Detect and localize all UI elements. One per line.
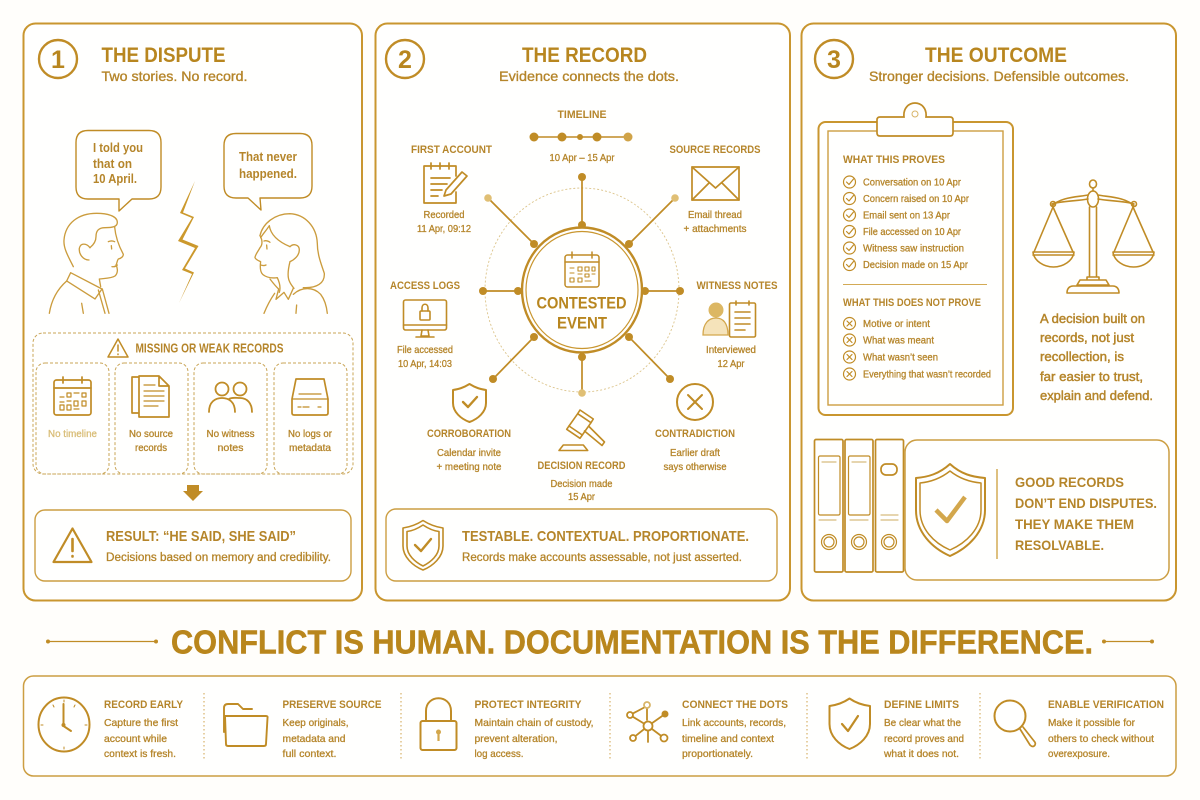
list heading: what this does not prove: WHAT THIS DOES NOT PROVE bbox=[843, 297, 981, 309]
card: no logs or metadata bbox=[274, 363, 347, 474]
item: protect integrity: log access. bbox=[474, 748, 524, 760]
card: no source records: No source bbox=[129, 428, 173, 440]
center node: contested event: CONTESTED bbox=[536, 294, 626, 312]
list: not proven items: What was meant bbox=[863, 334, 934, 346]
node: contradiction: CONTRADICTION bbox=[655, 428, 735, 440]
item: define limits: what it does not. bbox=[883, 748, 959, 760]
heading: the dispute: THE DISPUTE bbox=[102, 44, 226, 67]
callout: good records bbox=[905, 440, 1169, 580]
item: connect the dots: CONNECT THE DOTS bbox=[682, 699, 788, 711]
list: proven items: Conversation on 10 Apr bbox=[863, 176, 961, 188]
step number 3: 3 bbox=[827, 46, 841, 74]
item: define limits: DEFINE LIMITS bbox=[884, 699, 959, 711]
icon: binders bbox=[814, 440, 904, 572]
callout: result he said she said: RESULT: “HE SAID, SHE SAID” bbox=[106, 528, 296, 545]
list heading: what this proves: WHAT THIS PROVES bbox=[843, 154, 945, 166]
node: decision record: DECISION RECORD bbox=[538, 460, 626, 472]
item: enable verification: Make it possible for bbox=[1048, 717, 1135, 729]
item: define limits: record proves and bbox=[884, 733, 964, 745]
icon: man in profile bbox=[49, 213, 123, 313]
node: contradiction bbox=[655, 384, 735, 473]
item: enable verification: ENABLE VERIFICATION bbox=[1048, 699, 1164, 711]
item: preserve source: Keep originals, bbox=[282, 717, 348, 729]
item: preserve source: PRESERVE SOURCE bbox=[282, 699, 382, 711]
speech bubble: I told you: I told you bbox=[93, 141, 143, 155]
item: protect integrity bbox=[420, 698, 594, 760]
card: no timeline: No timeline bbox=[48, 428, 97, 440]
icon: woman in profile bbox=[255, 214, 327, 313]
item: preserve source bbox=[224, 699, 382, 760]
list: not proven items: What wasn’t seen bbox=[863, 352, 938, 364]
card: no witness notes: No witness bbox=[206, 428, 254, 440]
callout: result he said she said: Decisions based on memory and credibility. bbox=[106, 552, 331, 564]
node: access logs: ACCESS LOGS bbox=[390, 280, 460, 292]
item: record early: RECORD EARLY bbox=[104, 699, 184, 711]
node: witness notes: 12 Apr bbox=[718, 358, 745, 370]
callout: testable contextual proportionate: TESTABLE. CONTEXTUAL. PROPORTIONATE. bbox=[462, 528, 749, 545]
node: source records bbox=[670, 144, 760, 235]
speech bubble: I told you: that on bbox=[93, 157, 132, 171]
callout: good records: RESOLVABLE. bbox=[1015, 537, 1104, 553]
card: no timeline bbox=[36, 363, 109, 474]
speech bubble: that never happened bbox=[224, 134, 312, 210]
card: no source records: records bbox=[135, 442, 167, 454]
icon: scales of justice bbox=[1033, 180, 1154, 293]
card: no logs or metadata: No logs or bbox=[288, 428, 332, 440]
item: enable verification: others to check without bbox=[1048, 733, 1154, 745]
panel: the dispute bbox=[24, 24, 362, 600]
text: a decision built on records: A decision built on bbox=[1040, 312, 1145, 326]
list: not proven items bbox=[844, 318, 991, 380]
list: not proven items: Everything that wasn’t recorded bbox=[863, 368, 991, 380]
node: first account: Recorded bbox=[424, 209, 465, 221]
arrow: down to result bbox=[183, 485, 203, 501]
center node: contested event bbox=[522, 228, 642, 352]
panel: the record bbox=[376, 24, 790, 600]
node: timeline: TIMELINE bbox=[558, 109, 606, 121]
item: protect integrity: PROTECT INTEGRITY bbox=[474, 699, 582, 711]
speech bubble: I told you bbox=[76, 130, 161, 211]
node: corroboration: + meeting note bbox=[436, 461, 502, 473]
item: enable verification: overexposure. bbox=[1048, 748, 1110, 760]
card: no witness notes: notes bbox=[218, 442, 244, 454]
step number 1: 1 bbox=[51, 46, 65, 74]
callout: good records: GOOD RECORDS bbox=[1015, 474, 1124, 490]
node: corroboration: Calendar invite bbox=[437, 447, 501, 459]
center node: contested event: EVENT bbox=[557, 314, 608, 332]
item: record early: Capture the first bbox=[104, 717, 178, 729]
node: source records: + attachments bbox=[684, 223, 746, 235]
hub diagram: spokes and rings bbox=[479, 173, 684, 397]
text: a decision built on records: far easier to trust, bbox=[1040, 370, 1143, 384]
item: define limits: Be clear what the bbox=[884, 717, 961, 729]
list: proven items: Concern raised on 10 Apr bbox=[863, 193, 969, 205]
clipboard: proves and does not prove bbox=[818, 103, 1013, 415]
speech bubble: I told you: 10 April. bbox=[93, 172, 137, 186]
item: connect the dots: Link accounts, records, bbox=[682, 717, 786, 729]
subheading: stronger decisions: Stronger decisions. Defensible outcomes. bbox=[869, 68, 1129, 84]
step number 2: 2 bbox=[398, 46, 412, 74]
callout: testable contextual proportionate bbox=[386, 509, 777, 581]
list: not proven items: Motive or intent bbox=[863, 318, 930, 330]
heading: missing or weak records: MISSING OR WEAK RECORDS bbox=[136, 342, 284, 356]
speech bubble: that never happened: happened. bbox=[239, 167, 297, 181]
icon: calendar bbox=[565, 252, 599, 287]
item: record early bbox=[38, 698, 184, 760]
node: decision record: 15 Apr bbox=[568, 491, 595, 503]
text: a decision built on records: explain and defend. bbox=[1040, 389, 1153, 403]
icon: large shield bbox=[916, 464, 985, 556]
icon: shield with check bbox=[403, 520, 443, 570]
text: a decision built on records bbox=[1040, 312, 1153, 403]
list: proven items: Decision made on 15 Apr bbox=[863, 259, 968, 271]
node: access logs bbox=[390, 280, 460, 370]
node: contradiction: Earlier draft bbox=[670, 447, 720, 459]
node: source records: Email thread bbox=[688, 209, 742, 221]
text: a decision built on records: records, not just bbox=[1040, 331, 1135, 345]
node: first account bbox=[411, 144, 492, 235]
node: witness notes: WITNESS NOTES bbox=[696, 280, 778, 292]
icon: clip bbox=[877, 103, 953, 136]
step number 2 bbox=[386, 40, 424, 78]
list: proven items: Witness saw instruction bbox=[863, 242, 964, 254]
list: proven items: File accessed on 10 Apr bbox=[863, 226, 961, 238]
subheading: two stories: Two stories. No record. bbox=[102, 68, 248, 84]
panel: missing or weak records bbox=[33, 333, 353, 474]
card: no witness notes bbox=[194, 363, 267, 474]
heading: the outcome: THE OUTCOME bbox=[925, 44, 1067, 67]
card: no source records bbox=[115, 363, 188, 474]
node: witness notes bbox=[696, 280, 778, 370]
tagline banner: CONFLICT IS HUMAN. DOCUMENTATION IS THE DIFFERENCE. bbox=[171, 624, 1093, 660]
item: enable verification bbox=[994, 699, 1164, 760]
panel: the outcome bbox=[802, 24, 1176, 600]
node: first account: FIRST ACCOUNT bbox=[411, 144, 492, 156]
item: connect the dots: timeline and context bbox=[682, 733, 774, 745]
list: proven items bbox=[844, 176, 969, 271]
icon: lightning bolt bbox=[178, 181, 198, 303]
text: a decision built on records: recollection, is bbox=[1040, 350, 1124, 364]
subheading: evidence connects the dots: Evidence connects the dots. bbox=[499, 68, 679, 84]
item: protect integrity: prevent alteration, bbox=[474, 733, 558, 745]
node: decision record: Decision made bbox=[550, 478, 613, 490]
item: preserve source: full context. bbox=[282, 748, 336, 760]
icon: warning small bbox=[108, 339, 128, 357]
callout: good records: DON’T END DISPUTES. bbox=[1015, 495, 1157, 511]
item: connect the dots bbox=[627, 699, 788, 760]
heading: the record: THE RECORD bbox=[522, 44, 647, 67]
item: record early: account while bbox=[104, 733, 167, 745]
callout: result he said she said bbox=[35, 510, 351, 581]
item: define limits bbox=[830, 698, 964, 760]
node: timeline bbox=[530, 109, 632, 164]
item: connect the dots: proportionately. bbox=[682, 748, 753, 760]
node: access logs: File accessed bbox=[397, 344, 453, 356]
node: first account: 11 Apr, 09:12 bbox=[417, 223, 471, 235]
callout: testable contextual proportionate: Records make accounts assessable, not just asserted. bbox=[462, 550, 742, 564]
node: timeline: 10 Apr – 15 Apr bbox=[550, 152, 615, 164]
icon: warning bbox=[54, 528, 92, 562]
item: preserve source: metadata and bbox=[282, 733, 346, 745]
card: no logs or metadata: metadata bbox=[289, 442, 331, 454]
list: proven items: Email sent on 13 Apr bbox=[863, 210, 950, 222]
step number 1 bbox=[39, 40, 77, 78]
speech bubble: that never happened: That never bbox=[239, 150, 297, 164]
node: decision record bbox=[538, 410, 626, 503]
item: record early: context is fresh. bbox=[104, 748, 176, 760]
node: contradiction: says otherwise bbox=[664, 461, 727, 473]
panel: six practices bbox=[24, 676, 1176, 776]
node: corroboration: CORROBORATION bbox=[427, 428, 511, 440]
node: access logs: 10 Apr, 14:03 bbox=[398, 358, 452, 370]
node: corroboration bbox=[427, 384, 511, 473]
node: witness notes: Interviewed bbox=[706, 344, 756, 356]
callout: good records: THEY MAKE THEM bbox=[1015, 516, 1134, 532]
node: source records: SOURCE RECORDS bbox=[670, 144, 760, 156]
item: protect integrity: Maintain chain of custody, bbox=[474, 717, 594, 729]
step number 3 bbox=[815, 40, 853, 78]
